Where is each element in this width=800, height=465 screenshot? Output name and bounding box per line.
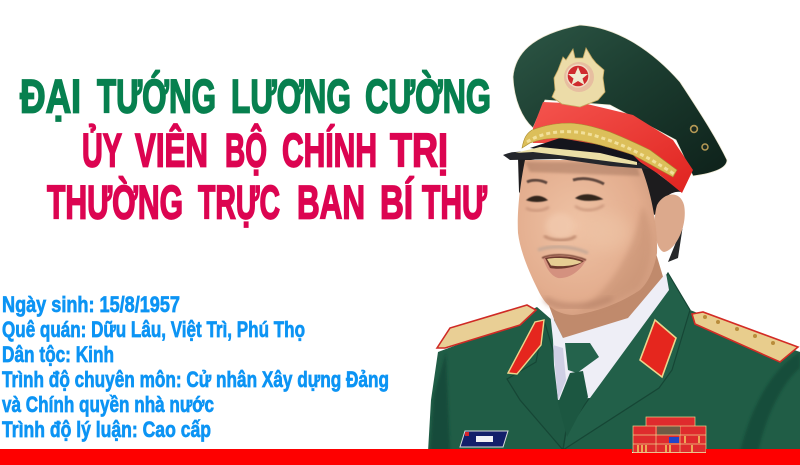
red bottom bar right segment <box>632 453 706 465</box>
mouth interior <box>545 256 584 269</box>
teeth <box>547 258 582 266</box>
cap <box>503 25 727 193</box>
right shoulder board <box>692 312 798 362</box>
home town: Quê quán: Dữu Lâu, Việt Trì, Phú Thọ <box>2 317 305 342</box>
title line 3: BÍ <box>380 176 414 228</box>
cap band <box>533 102 693 193</box>
left lapel <box>507 320 566 450</box>
title line 1: LƯƠNG <box>231 70 351 122</box>
title line 2: VIÊN <box>135 124 208 176</box>
cap badge <box>552 48 605 107</box>
title line 2: CHÍNH <box>282 124 377 176</box>
cap eyelets <box>691 126 697 132</box>
visor gold trim <box>515 147 637 165</box>
ear <box>655 194 685 252</box>
red bottom bar <box>0 449 632 465</box>
jaw shading <box>576 205 652 312</box>
right eyebrow <box>573 179 604 184</box>
uniform jacket <box>428 273 800 452</box>
name tag <box>460 431 508 447</box>
nose <box>546 213 574 239</box>
braid twist detail <box>527 132 674 174</box>
birth date: Ngày sinh: 15/8/1957 <box>2 292 180 317</box>
cap crown <box>513 25 727 176</box>
title <box>20 70 491 228</box>
red bottom bar far right <box>706 449 800 465</box>
right eye <box>576 195 602 200</box>
moustache shadow <box>538 247 588 253</box>
title line 3 <box>47 176 487 228</box>
education line 1: Trình độ chuyên môn: Cử nhân Xây dựng Đảng <box>2 367 389 392</box>
portrait of general <box>428 25 800 452</box>
chin shadow <box>545 298 612 306</box>
title line 1 <box>20 70 491 122</box>
title line 1: TƯỚNG <box>97 70 216 122</box>
title line 3: BAN <box>297 176 365 228</box>
title line 1: CƯỜNG <box>365 70 491 122</box>
neck <box>545 250 664 340</box>
forehead shadow under visor <box>525 162 640 176</box>
visor <box>503 150 650 169</box>
hair <box>518 158 682 216</box>
left eyebrow <box>527 180 547 183</box>
title line 3: TRỰC <box>198 176 280 228</box>
biography details <box>2 292 389 442</box>
title line 3: THƯỜNG <box>47 176 183 228</box>
left shoulder board <box>437 305 536 348</box>
gold braid <box>522 123 677 177</box>
right lapel <box>563 273 690 450</box>
title line 2 <box>82 124 448 176</box>
under-eye creases <box>526 205 604 211</box>
right collar tab <box>640 320 676 377</box>
political theory level: Trình độ lý luận: Cao cấp <box>2 417 211 442</box>
lower lip <box>543 256 586 278</box>
face <box>518 160 657 315</box>
shirt collar <box>550 273 669 400</box>
title line 2: TRỊ <box>390 124 448 176</box>
title line 3: THƯ <box>422 176 487 228</box>
upper lip <box>542 255 586 260</box>
ethnicity: Dân tộc: Kinh <box>2 342 114 367</box>
hair behind ear <box>668 225 683 262</box>
cheek highlight <box>586 214 630 250</box>
dark strip under braid <box>530 138 642 164</box>
star <box>568 67 588 85</box>
title line 2: ỦY <box>82 124 122 176</box>
wreath <box>552 48 605 107</box>
education line 2: và Chính quyền nhà nước <box>2 392 214 417</box>
necktie <box>558 343 599 437</box>
left eye <box>527 196 547 202</box>
left collar tab <box>508 320 544 374</box>
title line 1: ĐẠI <box>20 70 81 122</box>
title line 2: BỘ <box>225 124 267 176</box>
medal ribbons <box>633 417 706 452</box>
nose underside <box>544 236 576 240</box>
